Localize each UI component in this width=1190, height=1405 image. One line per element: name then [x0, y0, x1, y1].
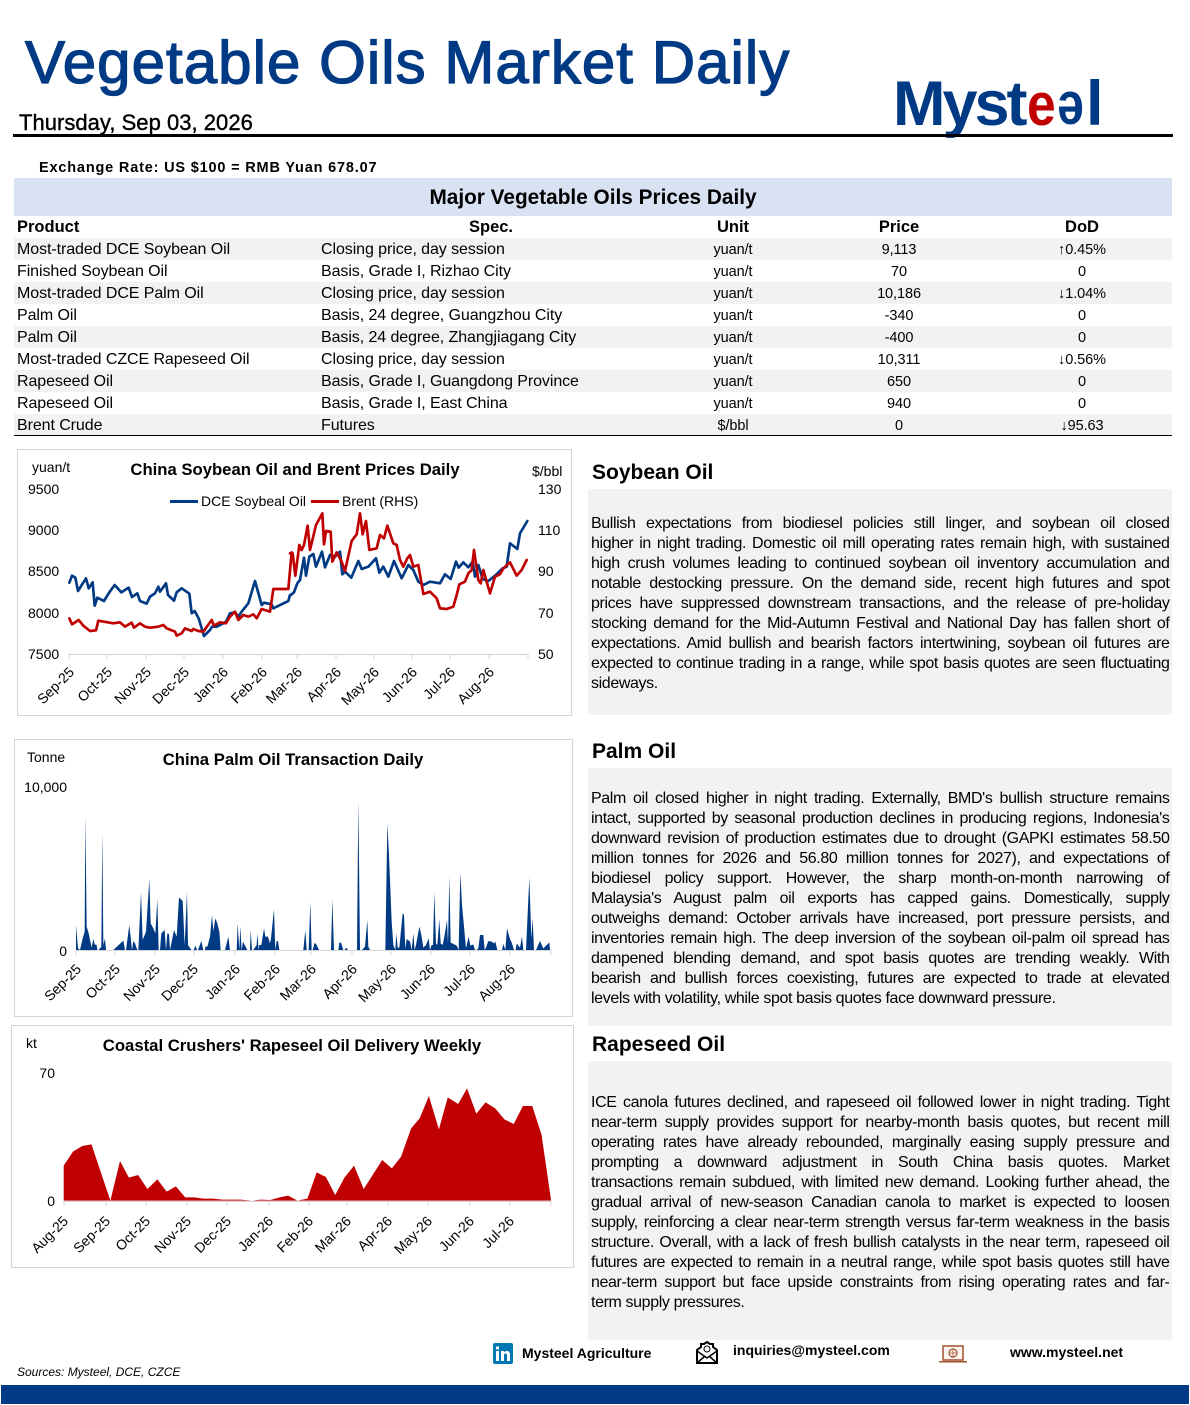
row: DCE soybean oil	[14, 238, 1172, 260]
line: Brent	[69, 513, 527, 636]
panel: palm oil commentary: biodiesel policy support. However, the sharp month-on-month narrowing of	[591, 870, 1170, 887]
panel: rapeseed oil commentary: supply, reinforcing a clear near-term strength versus far-term weakness in the basis	[591, 1214, 1170, 1231]
y axis: 10,000	[24, 779, 67, 795]
x labels: Jan-26	[190, 664, 231, 705]
panel: palm oil commentary: million tonnes for 2026 and 56.80 million tonnes for 2027), and expectations of	[591, 850, 1170, 867]
heading: rapeseed oil: Rapeseed Oil	[592, 1033, 725, 1056]
x axis	[64, 1201, 551, 1206]
sources: Sources: Mysteel, DCE, CZCE	[17, 1365, 180, 1379]
row: finished soybean oil: 70	[891, 264, 907, 280]
x labels: Jul-26	[420, 664, 458, 702]
row: CZCE rapeseed oil	[17, 351, 1106, 368]
x labels: Nov-25	[111, 664, 154, 707]
x labels: Oct-25	[74, 664, 115, 705]
panel: rapeseed oil commentary: term supply pressures.	[591, 1294, 744, 1311]
logo: Mysteel: e	[1027, 70, 1056, 138]
line: DCE soybean oil	[69, 521, 527, 636]
row: palm oil Zhangjiagang: Palm Oil	[17, 329, 77, 346]
chart title: China Soybean Oil and Brent Prices Daily	[130, 460, 460, 479]
x labels: Apr-26	[303, 664, 344, 705]
panel: soybean oil commentary: stocking demand for the Mid-Autumn Festival and National Day has fallen short of	[591, 615, 1170, 632]
heading: soybean oil: Soybean Oil	[592, 461, 713, 484]
panel: rapeseed oil commentary: transactions remain subdued, with limited new demand. Looking further ahead, the	[591, 1174, 1170, 1191]
row: rapeseed oil East China: 940	[887, 396, 911, 412]
footer bar	[1, 1385, 1189, 1404]
row: DCE palm oil: ↓1.04%	[1058, 286, 1106, 302]
x labels: Sep-25	[41, 961, 84, 1004]
table title	[14, 178, 1172, 216]
panel: rapeseed oil commentary: operating rates have already rebounded, marginally easing supply pressure and	[591, 1134, 1170, 1151]
x labels: Jul-26	[479, 1213, 517, 1251]
legend: DCE Soybeal Oil	[201, 493, 306, 509]
panel: palm oil commentary: intact, supported by seasonal production declines in producing regions, Indonesia's	[591, 810, 1170, 827]
panel: rapeseed oil commentary: gradual arrival of new-season Canadian canola to market is expected to loosen	[591, 1194, 1170, 1211]
row: DCE soybean oil: yuan/t	[713, 242, 753, 258]
left axis: 9500	[28, 481, 59, 497]
row: Brent crude: Futures	[321, 417, 375, 434]
row: finished soybean oil: Basis, Grade I, Rizhao City	[321, 263, 511, 280]
row: finished soybean oil: 0	[1078, 264, 1086, 280]
right axis: 130	[538, 481, 562, 497]
y axis	[24, 779, 67, 959]
row: rapeseed oil East China: Rapeseed Oil	[17, 395, 113, 412]
right axis: 110	[538, 522, 561, 538]
legend: Brent (RHS)	[342, 493, 418, 509]
logo: Mysteel: l	[1086, 70, 1104, 139]
panel: rapeseed oil commentary: near-term support but face upside constraints from rising operating rates and far-	[591, 1274, 1170, 1291]
row: Brent crude	[14, 414, 1172, 436]
x labels	[28, 1213, 517, 1257]
panel: soybean oil commentary: expectations. Amid bullish and bearish factors intertwining, soybean oil futures are	[591, 635, 1170, 652]
panel: soybean oil commentary	[588, 489, 1172, 715]
panel: rapeseed oil commentary: near-term supply provides support for nearby-month basis quotes, but recent mill	[591, 1114, 1170, 1131]
panel: rapeseed oil commentary: futures are expected to remain in a neutral range, while spot basis quotes still have	[591, 1254, 1170, 1271]
row: palm oil Zhangjiagang: Basis, 24 degree, Zhangjiagang City	[321, 329, 576, 346]
date: Thursday, Sep 03, 2026	[19, 110, 253, 135]
right axis: 90	[538, 563, 554, 579]
contact: website: www.mysteel.net	[1010, 1344, 1123, 1360]
row: palm oil Zhangjiagang: 0	[1078, 330, 1086, 346]
row: DCE soybean oil: ↑0.45%	[1058, 242, 1106, 258]
panel: palm oil commentary: bearish and bullish forces coexisting, futures are expected to trade at elevated	[591, 970, 1170, 987]
row: palm oil Guangzhou: Basis, 24 degree, Guangzhou City	[321, 307, 562, 324]
heading: palm oil: Palm Oil	[592, 740, 676, 763]
x labels: Dec-25	[158, 961, 201, 1004]
panel: palm oil commentary: downward revision of production estimates due to drought (GAPKI estimates 58.50	[591, 830, 1170, 847]
right axis	[538, 481, 562, 662]
x labels: Apr-26	[354, 1213, 395, 1254]
row: rapeseed oil Guangdong: Basis, Grade I, Guangdong Province	[321, 373, 579, 390]
x labels: Sep-25	[70, 1213, 113, 1256]
y axis: 0	[59, 943, 67, 959]
row: DCE palm oil: Closing price, day session	[321, 285, 505, 302]
left axis: 8500	[28, 563, 59, 579]
right axis: 70	[538, 605, 554, 621]
chart: palm oil transactions: Tonne	[27, 749, 65, 765]
panel: prices table	[14, 178, 1172, 436]
chart: rapeseed oil delivery: kt	[26, 1035, 37, 1051]
x labels: May-26	[338, 664, 382, 708]
row: palm oil Guangzhou: Palm Oil	[17, 307, 77, 324]
x labels: Feb-26	[240, 961, 283, 1003]
row: CZCE rapeseed oil: Most-traded CZCE Rapeseed Oil	[17, 351, 249, 368]
x axis	[69, 654, 528, 659]
row: CZCE rapeseed oil: 10,311	[878, 352, 920, 368]
panel: palm oil commentary: inventories remain high. The deep inversion of the soybean oil-palm oil spread has	[591, 930, 1170, 947]
row: CZCE rapeseed oil: ↓0.56%	[1058, 352, 1106, 368]
row: Brent crude: 0	[895, 418, 903, 434]
table header: DoD	[1065, 218, 1099, 236]
row: finished soybean oil: Finished Soybean Oil	[17, 263, 168, 280]
left axis: 8000	[28, 605, 59, 621]
x labels: Apr-26	[319, 961, 360, 1002]
row: palm oil Zhangjiagang: yuan/t	[713, 330, 753, 346]
row: palm oil Guangzhou: 0	[1078, 308, 1086, 324]
x labels: Oct-25	[112, 1213, 153, 1254]
left axis: 7500	[28, 646, 59, 662]
panel: palm oil commentary: dampened blending demand, and spot basis quotes are trending weakly. With	[591, 950, 1170, 967]
area: transactions	[76, 800, 550, 950]
row: DCE palm oil: 10,186	[877, 286, 921, 302]
table header: Price	[879, 218, 919, 236]
row: rapeseed oil East China	[17, 395, 1086, 412]
row: rapeseed oil Guangdong: 0	[1078, 374, 1086, 390]
x labels: May-26	[391, 1213, 435, 1257]
row: DCE palm oil: yuan/t	[713, 286, 753, 302]
table header	[17, 218, 1099, 236]
panel: soybean oil commentary: Bullish expectations from biodiesel policies still linger, and soybean oil closed	[591, 515, 1170, 532]
x labels: Oct-25	[82, 961, 123, 1002]
row: CZCE rapeseed oil: Closing price, day session	[321, 351, 505, 368]
row: rapeseed oil East China: yuan/t	[713, 396, 753, 412]
icon: LinkedIn	[493, 1343, 513, 1364]
panel: rapeseed oil commentary: ICE canola futures declined, and rapeseed oil followed lower in night trading. Tight	[591, 1094, 1170, 1111]
x labels: Nov-25	[120, 961, 163, 1004]
row: rapeseed oil Guangdong: Rapeseed Oil	[17, 373, 113, 390]
panel: rapeseed oil commentary	[588, 1061, 1172, 1340]
table title: Major Vegetable Oils Prices Daily	[429, 186, 757, 209]
title: Vegetable Oils Market Daily	[25, 29, 790, 96]
panel: palm oil commentary: levels with volatility, while spot basis quotes face downward pressure.	[591, 990, 1056, 1007]
row: Brent crude: Brent Crude	[17, 417, 102, 434]
x axis	[76, 950, 551, 955]
y axis: 70	[39, 1065, 55, 1081]
y axis	[39, 1065, 55, 1209]
table header: Spec.	[469, 218, 513, 236]
contact: LinkedIn name: Mysteel Agriculture	[522, 1345, 651, 1361]
x labels: Mar-26	[262, 664, 305, 706]
icon: laptop	[939, 1345, 967, 1362]
x labels: Sep-25	[34, 664, 77, 707]
row: DCE soybean oil: Closing price, day session	[321, 241, 505, 258]
row: CZCE rapeseed oil: yuan/t	[713, 352, 753, 368]
chart: soybean oil and Brent prices: $/bbl	[532, 463, 562, 479]
row: finished soybean oil	[17, 263, 1086, 280]
logo: Mysteel: Myst	[893, 70, 1028, 139]
row: rapeseed oil East China: 0	[1078, 396, 1086, 412]
panel: soybean oil commentary: notable destocking pressure. On the demand side, recent high futures and spot	[591, 575, 1170, 592]
x labels: Jun-26	[379, 664, 420, 705]
x labels: Feb-26	[273, 1213, 316, 1255]
chart: palm oil transactions	[14, 739, 573, 1017]
x labels: Feb-26	[227, 664, 270, 706]
x labels: Aug-26	[475, 961, 518, 1004]
header rule	[13, 134, 1173, 137]
logo: Mysteel	[893, 70, 1104, 140]
panel: palm oil commentary	[588, 768, 1172, 1026]
row: DCE soybean oil: Most-traded DCE Soybean Oil	[17, 241, 230, 258]
row: rapeseed oil East China: Basis, Grade I, East China	[321, 395, 507, 412]
panel: palm oil commentary: Malaysia's August palm oil exports has capped gains. Domestically, supply	[591, 890, 1170, 907]
row: finished soybean oil: yuan/t	[713, 264, 753, 280]
x labels: Dec-25	[149, 664, 192, 707]
panel: palm oil commentary: outweighs demand: October arrivals have increased, port pressure persists, and	[591, 910, 1170, 927]
left axis: 9000	[28, 522, 59, 538]
x labels: Jun-26	[397, 961, 438, 1002]
row: palm oil Zhangjiagang: -400	[885, 330, 913, 346]
right axis: 50	[538, 646, 554, 662]
panel: soybean oil commentary: high crush volumes leading to continued soybean oil inventory accumulation and	[591, 555, 1170, 572]
legend	[170, 493, 418, 509]
panel: soybean oil commentary: higher in night trading. Domestic oil mill operating rates remain high, with sustained	[591, 535, 1170, 552]
row: Brent crude: $/bbl	[717, 418, 749, 434]
panel: rapeseed oil commentary: structure. Overall, with a lack of fresh bullish catalysts in the near term, rapeseed oil	[591, 1234, 1170, 1251]
row: rapeseed oil Guangdong: yuan/t	[713, 374, 753, 390]
table header: Product	[17, 218, 79, 236]
row: palm oil Guangzhou: -340	[885, 308, 913, 324]
row: palm oil Zhangjiagang	[14, 326, 1172, 348]
row: palm oil Guangzhou: yuan/t	[713, 308, 753, 324]
row: DCE palm oil: Most-traded DCE Palm Oil	[17, 285, 204, 302]
x labels: Aug-26	[454, 664, 497, 707]
row: DCE palm oil	[14, 282, 1172, 304]
table header: Unit	[717, 218, 749, 236]
x labels: Mar-26	[311, 1213, 354, 1255]
area: delivery	[64, 1088, 551, 1201]
panel: soybean oil commentary: prices have suppressed downstream transactions, and the release of pre-holiday	[591, 595, 1170, 612]
row: DCE soybean oil: 9,113	[882, 242, 916, 258]
chart: soybean oil and Brent prices: yuan/t	[32, 459, 70, 475]
row: palm oil Guangzhou	[17, 307, 1086, 324]
panel: palm oil commentary: Palm oil closed higher in night trading. Externally, BMD's bullish structure remains	[591, 790, 1170, 807]
x labels: May-26	[355, 961, 399, 1005]
panel: soybean oil commentary: expected to continue trading in a range, while spot basis quotes are seen fluctuating	[591, 655, 1170, 672]
left axis	[28, 481, 59, 662]
y axis: 0	[47, 1193, 55, 1209]
x labels: Dec-25	[191, 1213, 234, 1256]
x labels: Mar-26	[276, 961, 319, 1003]
icon: envelope	[696, 1341, 718, 1364]
chart: rapeseed oil delivery	[11, 1025, 574, 1268]
contact: email: inquiries@mysteel.com	[733, 1342, 890, 1358]
x labels	[41, 961, 518, 1005]
row: rapeseed oil Guangdong	[14, 370, 1172, 392]
x labels: Aug-25	[28, 1213, 71, 1256]
chart title: Coastal Crushers' Rapeseel Oil Delivery Weekly	[103, 1036, 482, 1055]
chart title: China Palm Oil Transaction Daily	[163, 750, 424, 769]
panel: soybean oil commentary: sideways.	[591, 675, 658, 692]
x labels: Jan-26	[202, 961, 243, 1002]
row: rapeseed oil Guangdong: 650	[887, 374, 911, 390]
x labels: Jan-26	[235, 1213, 276, 1254]
x labels: Nov-25	[151, 1213, 194, 1256]
exchange rate: Exchange Rate: US $100 = RMB Yuan 678.07	[39, 160, 377, 176]
x labels: Jul-26	[440, 961, 478, 999]
row: Brent crude: ↓95.63	[1060, 418, 1104, 434]
chart: soybean oil and Brent prices	[17, 449, 572, 716]
x labels	[34, 664, 497, 708]
x labels: Jun-26	[436, 1213, 477, 1254]
panel: rapeseed oil commentary: prompting a downward adjustment in South China basis quotes. Market	[591, 1154, 1170, 1171]
